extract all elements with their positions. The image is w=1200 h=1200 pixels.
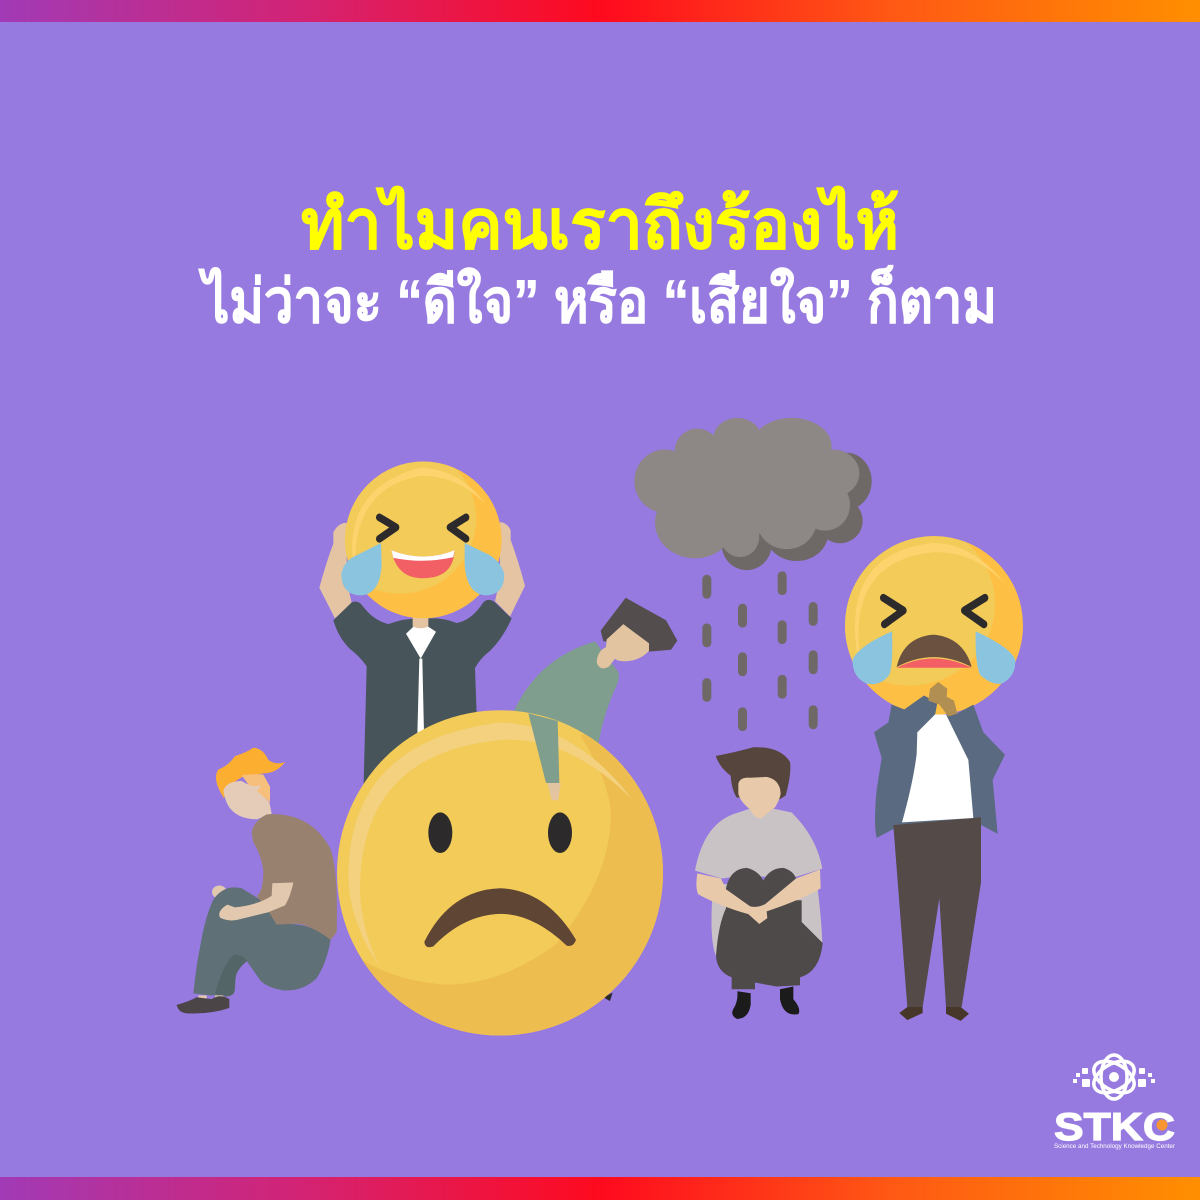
big sad emoji xyxy=(337,710,663,1036)
crying standing man xyxy=(845,536,1023,1021)
bottom gradient bar xyxy=(0,1177,1200,1200)
logo: tagline: Science and Technology Knowledge Center xyxy=(1054,1143,1176,1150)
leaning person xyxy=(513,598,677,1001)
logo: atom mark xyxy=(1073,1055,1155,1099)
leaning person's arm xyxy=(528,713,561,800)
laughing emoji face xyxy=(341,462,504,618)
STKC logo xyxy=(1054,1055,1176,1150)
laughing man with raised arms xyxy=(319,522,525,794)
title: ทำไมคนเราถึงร้องไห้ xyxy=(301,185,899,263)
illustration: right group xyxy=(634,418,1023,1021)
top gradient bar xyxy=(0,0,1200,22)
rain cloud xyxy=(634,418,872,570)
rain drops xyxy=(702,571,818,731)
logo: wordmark: STKC xyxy=(1054,1106,1175,1149)
illustration: left group xyxy=(176,462,678,1036)
crouching boy xyxy=(695,747,823,1019)
title xyxy=(198,185,997,335)
logo: orange dot xyxy=(1156,1120,1168,1130)
title: ไม่ว่าจะ “ดีใจ” หรือ “เสียใจ” ก็ตาม xyxy=(198,265,997,335)
sitting man with orange hair xyxy=(177,748,337,1014)
